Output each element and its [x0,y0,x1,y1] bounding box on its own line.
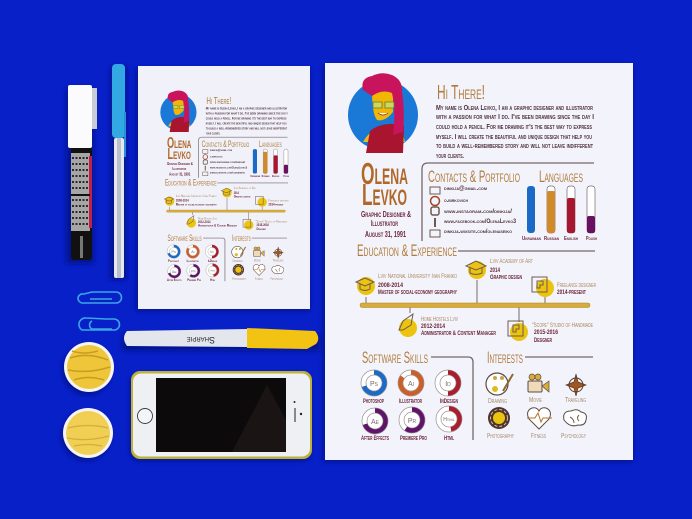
education timeline: Home Hostels Lviv [421,316,458,323]
interests [486,348,593,440]
small interests: Drawing [233,259,243,263]
sharpie marker: Sharpie [187,335,215,345]
small timeline: Designer [256,227,266,231]
sharpie marker [124,328,318,349]
small languages: English [272,174,280,178]
gold paint pan bottom [63,408,113,458]
software skills: Id [445,381,451,388]
small name: Levko [168,145,191,163]
small timeline: Home Hostels Lviv [198,216,218,220]
smartphone [131,371,312,459]
small interests: Interests [232,233,251,243]
small interests: Fitness [255,277,263,281]
small languages [250,139,289,178]
small languages: Polish [283,174,289,178]
small timeline: 2014-present [268,202,284,206]
interests: Psychology [561,433,586,440]
small name: Graphic Designer & [167,161,193,166]
education timeline: Lviv National University Ivan Franko [378,273,457,280]
small contacts: dinkija@gmail.com [210,148,232,152]
small contacts: o.birkovich [210,154,223,158]
small resume content [160,90,289,282]
small interests [232,233,287,281]
education timeline: 2014 [490,267,500,274]
small languages: Languages [259,139,282,149]
interests: Traveling [565,397,586,404]
education timeline: Freelance designer [557,282,596,289]
small interests: Psychology [270,277,283,281]
education heading: Education & Experience [357,241,457,260]
small software skills: Ai [191,250,195,254]
education timeline: Designer [534,337,552,344]
intro paragraph: myself. I will create the beautiful and unique design that help you [436,132,592,141]
large resume content [348,73,597,442]
interests: Drawing [488,398,507,405]
object shadows [61,65,633,462]
intro paragraph: your clients. [436,151,464,160]
software skills: Ps [370,381,379,388]
name and title: Levko [362,177,407,212]
name and title: Graphic Designer & [361,210,411,219]
interests: Movie [529,397,542,404]
portrait [348,73,418,153]
name and title: August 31, 1991 [365,230,406,239]
languages bars: Russian [544,236,559,242]
contacts and portfolio: www.facebook.com/OlenaLevko3 [444,219,517,225]
small timeline: "Scope" Studio of Handmade [255,219,288,223]
small contacts [202,139,249,176]
intro paragraph: with a passion for what I do. I've been drawing since the day I [436,112,594,121]
languages bars: English [564,236,578,242]
small timeline: Administrator & Content Manager [198,224,237,228]
education timeline: 2014-present [557,289,586,296]
software skills: After Effects [361,435,389,442]
interests: Interests [487,348,523,367]
small intro: could hold a pencil. For me drawing it's the best way to express [206,115,286,120]
software skills: InDesign [440,398,458,405]
small timeline: 2015-2016 [256,223,269,227]
small languages: Ukrainian [250,174,261,178]
small software skills: Pr [191,269,197,273]
small timeline: 2014 [234,191,239,195]
intro paragraph: to build a well-remembered story and will not leave indifferent [436,141,593,150]
education timeline: 2015-2016 [534,329,558,336]
languages bars [522,167,597,242]
small software skills: Photoshop [168,259,179,263]
small timeline: Freelance designer [268,199,289,203]
small name: August 31, 1991 [169,172,191,177]
small timeline: Lviv National University Ivan Franko [176,194,217,198]
small software skills: Premiere Pro [187,278,202,282]
small name: Olena [167,134,191,152]
small software skills: Illustrator [187,259,199,263]
software skills: Ai [408,381,414,388]
software skills: Illustrator [399,398,422,405]
small software skills: Ae [172,270,176,274]
small intro: My name is Olena Levko, I am a graphic designer and illustrator [206,106,288,111]
small software skills: Html [210,278,216,282]
small languages: Russian [262,174,270,178]
software skills: Ae [371,419,380,426]
contacts and portfolio: o.birkovich [444,198,468,204]
greeting: Hi There! [437,82,485,104]
small intro: with a passion for what I do. I've been drawing since the day I [206,110,287,115]
education timeline: Graphic design [490,274,522,281]
small timeline: 2008-2014 [176,199,189,203]
small timeline: Lviv Academy of Art [234,186,257,190]
small education heading: Education & Experience [165,177,217,188]
small software skills: Ps [172,250,176,254]
large resume paper [325,63,633,460]
small software skills: InDesign [208,259,218,263]
education timeline: 2008-2014 [378,282,403,289]
small contacts: Contacts & Portfolio [202,139,249,149]
software skills: Software Skills [362,348,428,367]
blue pen [112,64,126,278]
software skills: Photoshop [363,398,384,405]
small software skills: Id [210,250,214,254]
small contacts: www.instagram.com/dinkija/ [210,160,245,164]
languages bars: Polish [586,236,597,242]
small name [167,134,193,177]
software skills: Pr [408,418,417,425]
gold paint pan top [64,342,114,392]
small intro: your clients. [206,131,220,136]
small timeline [164,186,289,231]
small interests: Traveling [273,258,284,262]
education timeline: Administrator & Content Manager [421,330,496,337]
languages bars: Languages [539,167,583,186]
interests: Photography [487,433,514,440]
small portrait [160,90,197,132]
education timeline: Master of social-economy geography [378,289,457,296]
name and title: Illustrator [371,219,398,228]
small interests: Photography [232,277,246,281]
interests: Fitness [531,433,546,440]
small contacts: www.facebook.com/OlenaLevko3 [210,165,247,169]
small contacts: dinkija.wixsite.com/olenaseiko [210,171,246,175]
small software skills: Software Skills [168,233,202,243]
software skills: Premiere Pro [400,435,427,442]
software skills: Html [443,417,456,423]
software skills [361,348,473,442]
contacts and portfolio: www.instagram.com/dinkija/ [444,209,512,215]
name and title: Olena [361,156,408,191]
intro paragraph [436,103,594,160]
paint marker [68,85,97,260]
small name: Illustrator [172,166,187,171]
small interests: Movie [254,258,261,262]
small software skills [167,233,225,282]
small resume paper [138,66,310,309]
languages bars: Ukrainian [522,236,541,242]
education timeline [356,258,596,344]
contacts and portfolio: Contacts & Portfolio [428,167,520,186]
small timeline: 2012-2014 [198,220,211,224]
paper clips [78,292,122,330]
name and title [361,156,411,239]
contacts and portfolio: dinkija.wixsite.com/olenaseiko [444,229,512,235]
contacts and portfolio [428,167,520,237]
small timeline: Graphic design [234,194,251,198]
small greeting: Hi There! [206,96,231,107]
small intro [206,106,288,136]
education timeline: "Scope" Studio of Handmade [532,322,593,329]
intro paragraph: could hold a pencil. For me drawing it's the best way to express [436,122,593,131]
small intro: myself. I will create the beautiful and unique design that help you [206,121,286,126]
intro paragraph: My name is Olena Levko, I am a graphic designer and illustrator [436,103,593,112]
education timeline: Lviv Academy of Art [490,258,533,265]
education timeline: 2012-2014 [421,323,445,330]
software skills: Html [444,435,454,442]
contacts and portfolio: dinkija@gmail.com [444,186,488,192]
small timeline: Master of social-economy geography [176,202,217,206]
small intro: to build a well-remembered story and will not leave indifferent [206,125,287,130]
small software skills: Html [210,268,216,272]
small software skills: After Effects [167,278,182,282]
